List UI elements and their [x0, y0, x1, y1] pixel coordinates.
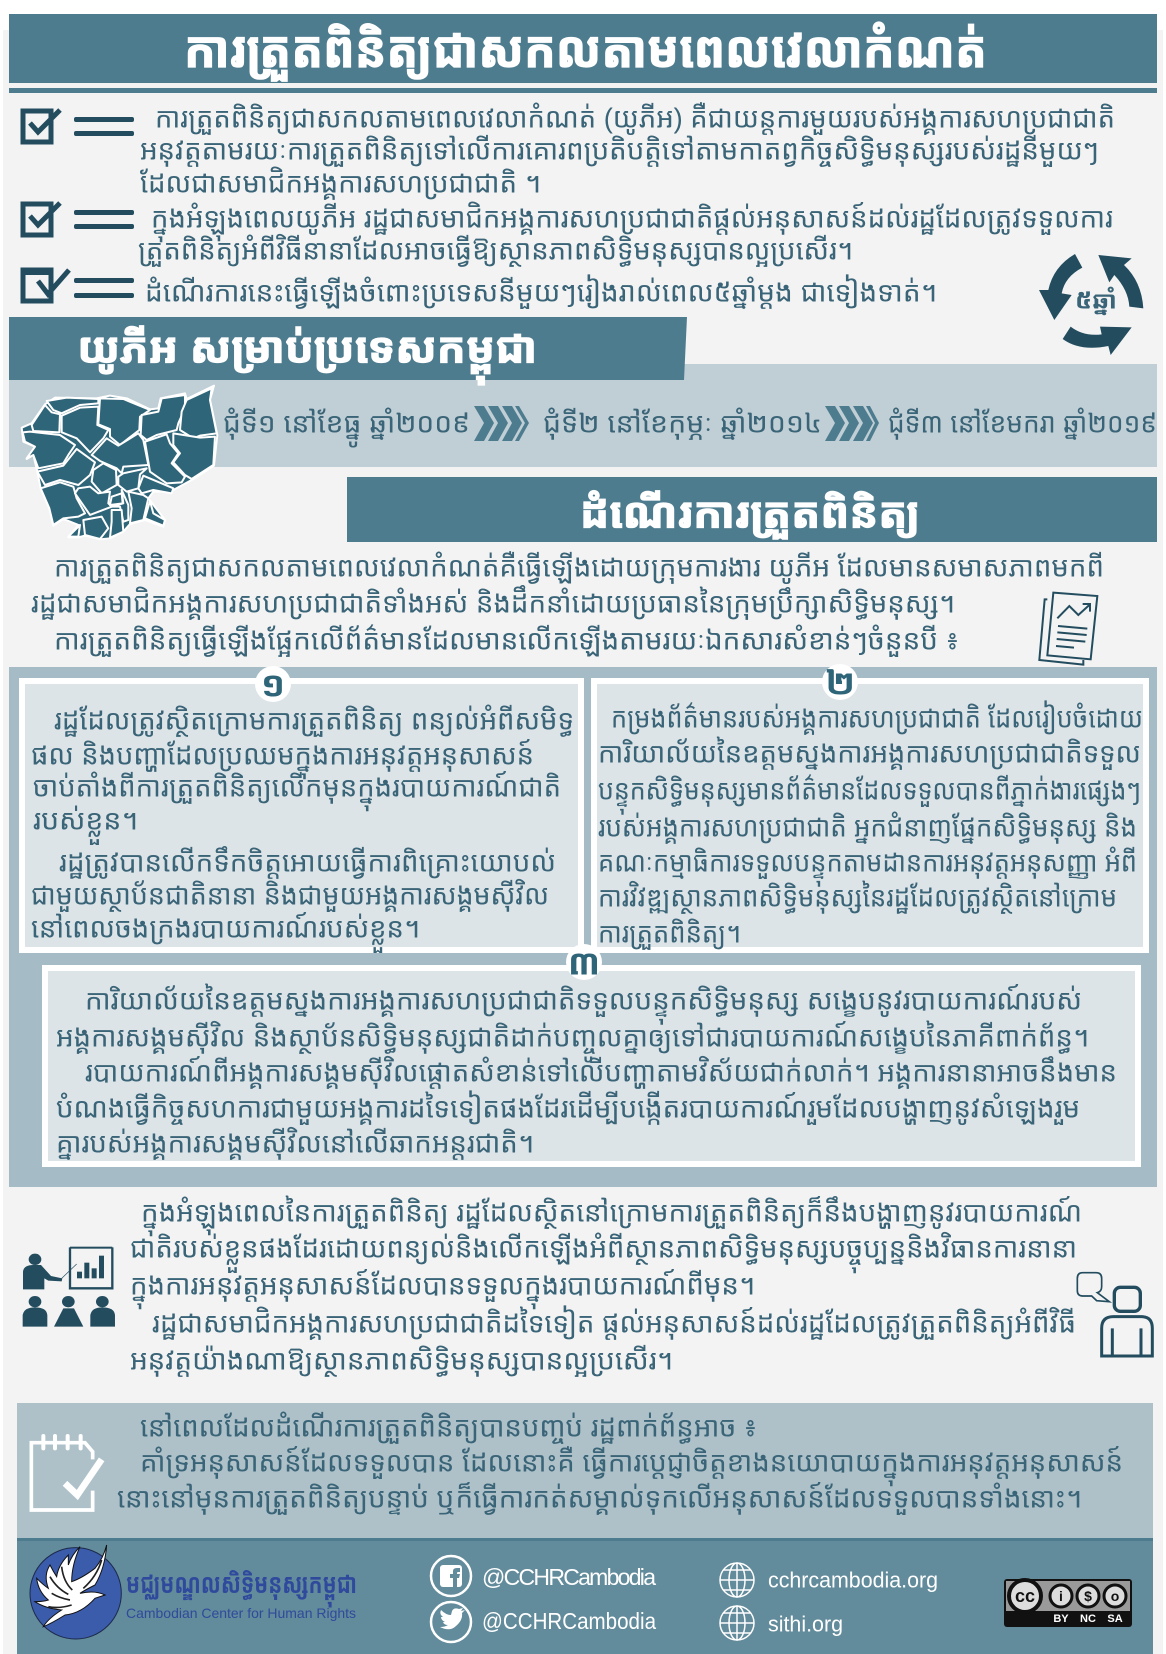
icon: checkbox 3 — [21, 268, 134, 301]
box 2 text: របស់អង្គការសហប្រជាជាតិ អ្នកជំនាញផ្នែកសិទ្ធិមនុស្ស និង — [598, 811, 1137, 845]
twitter handle: @CCHRCambodia — [482, 1608, 656, 1634]
icon: globe 2 — [720, 1606, 754, 1640]
box 3 text: គ្នារបស់អង្គការសង្គមស៊ីវិលនៅលើឆាកអន្តរជាតិ។ — [56, 1126, 534, 1161]
icon: creative commons BY-NC-SA: i — [1059, 1588, 1063, 1604]
box 3 text: អង្គការសង្គមស៊ីវិល និងស្ថាប័នសិទ្ធិមនុស្សជាតិដាក់បញ្ចូលគ្នាឲ្យទៅជារបាយការណ៍សង្ខេបនៃភាគីពាក់ព័ន្ធ។ — [56, 1020, 1089, 1062]
arrow: chevrons 1 — [474, 406, 529, 441]
panel: box 3 — [45, 942, 1138, 1164]
panel text: គាំទ្រអនុសាសន៍ដែលទទួលបាន ដែលនោះគឺ ធ្វើការប្តេជ្ញាចិត្តខាងនយោបាយក្នុងការអនុវត្តអនុសាសន៍ — [140, 1444, 1123, 1488]
text block: during review: រដ្ឋជាសមាជិកអង្គការសហប្រជាជាតិដទៃទៀត ផ្តល់អនុសាសន៍ដល់រដ្ឋដែលត្រូវត្រួតពិនិត្យអំពីវិធី — [152, 1304, 1076, 1341]
text block: during review — [130, 1194, 1082, 1378]
panel text: នៅពេលដែលដំណើរការត្រួតពិនិត្យបានបញ្ចប់ រដ្ឋពាក់ព័ន្ធអាច ៖ — [140, 1410, 757, 1444]
facebook handle: @CCHRCambodia — [482, 1564, 656, 1590]
text block: process intro: ការត្រួតពិនិត្យជាសកលតាមពេលវេលាកំណត់គឺធ្វើឡើងដោយក្រុមការងារ យូភីអ ដែលមានសមាសភាពមកពី — [54, 549, 1104, 584]
text block: process intro: រដ្ឋជាសមាជិកអង្គការសហប្រជាជាតិទាំងអស់ និងដឹកនាំដោយប្រធាននៃក្រុមប្រឹក្សាសិទ្ធិមនុស្ស។ — [31, 585, 955, 621]
box 2 text: ការិយាល័យនៃឧត្តមស្នងការអង្គការសហប្រជាជាតិទទួល — [598, 736, 1141, 770]
box 1 text — [31, 703, 574, 953]
icon: creative commons BY-NC-SA: BY — [1053, 1613, 1069, 1625]
icon: creative commons BY-NC-SA: NC — [1080, 1613, 1096, 1625]
schedule band — [9, 364, 1157, 467]
website 1: cchrcambodia.org — [768, 1568, 938, 1592]
text block: process intro: ការត្រួតពិនិត្យធ្វើឡើងផ្អែកលើព័ត៌មានដែលមានលើកឡើងតាមរយៈឯកសារសំខាន់ៗចំនួនបី ៖ — [54, 622, 959, 657]
box 3 text: ការិយាល័យនៃឧត្តមស្នងការអង្គការសហប្រជាជាតិទទួលបន្ទុកសិទ្ធិមនុស្ស សង្ខេបនូវរបាយការណ៍របស់ — [85, 982, 1082, 1026]
box 2 text: ការវិវឌ្ឍស្ថានភាពសិទ្ធិមនុស្សនៃរដ្ឋដែលត្រូវស្ថិតនៅក្រោម — [598, 880, 1117, 915]
icon: five year cycle arrows — [1039, 254, 1143, 355]
title banner — [9, 14, 1157, 93]
box 1 text: ជាមួយស្ថាប័នជាតិនានា និងជាមួយអង្គការសង្គមស៊ីវិល — [31, 878, 549, 913]
logo text Khmer: មជ្ឈមណ្ឌលសិទ្ធិមនុស្សកម្ពុជា — [126, 1569, 357, 1608]
heading: UPR for Cambodia — [9, 317, 687, 386]
text block: during review: ក្នុងអំឡុងពេលនៃការត្រួតពិនិត្យ រដ្ឋដែលស្ថិតនៅក្រោមការត្រួតពិនិត្យក៏នឹងបង្ហាញនូវរបាយការណ៍ — [141, 1194, 1082, 1238]
panel: box 2 — [594, 662, 1146, 950]
icon: notepad with check — [31, 1436, 102, 1510]
icon: checkbox 2 — [23, 203, 134, 235]
icon: creative commons BY-NC-SA: SA — [1107, 1613, 1123, 1625]
website 2: sithi.org — [768, 1612, 843, 1636]
text block: during review: ក្នុងការអនុវត្តអនុសាសន៍ដែលបានទទួលក្នុងរបាយការណ៍ពីមុន។ — [130, 1268, 755, 1311]
text block: intro 1: ដែលជាសមាជិកអង្គការសហប្រជាជាតិ ។ — [140, 166, 541, 200]
icon: creative commons BY-NC-SA: $ — [1084, 1588, 1092, 1604]
text block: intro 3: ដំណើរការនេះធ្វើឡើងចំពោះប្រទេសនីមួយៗរៀងរាល់ពេល៥ឆ្នាំម្តង ជាទៀងទាត់។ — [145, 274, 937, 309]
icon: twitter — [431, 1602, 471, 1642]
icon: creative commons BY-NC-SA: cc — [1015, 1586, 1035, 1606]
box 1 text: របស់ខ្លួន។ — [33, 804, 138, 845]
icon: creative commons BY-NC-SA — [1004, 1579, 1132, 1627]
box 1 text: រដ្ឋដែលត្រូវស្ថិតក្រោមការត្រួតពិនិត្យ ពន្យល់អំពីសមិទ្ធ — [54, 703, 574, 737]
text block: intro 1 — [140, 100, 1115, 200]
icon: creative commons BY-NC-SA: o — [1111, 1588, 1119, 1604]
logo: CCHR bird — [30, 1545, 121, 1639]
heading: UPR for Cambodia: យូភីអ សម្រាប់ប្រទេសកម្ពុជា — [78, 324, 537, 386]
heading: review process — [347, 477, 1157, 542]
text block: during review: អនុវត្តយ៉ាងណាឱ្យស្ថានភាពសិទ្ធិមនុស្សបានល្អប្រសើរ។ — [130, 1343, 673, 1378]
schedule: round 1: ជុំទី១ នៅខែធ្នូ ឆ្នាំ២០០៩ — [223, 406, 470, 448]
box 1 text: ផល និងបញ្ហាដែលប្រឈមក្នុងការអនុវត្តអនុសាសន៍ — [31, 738, 534, 781]
box 1 text: នៅពេលចងក្រងរបាយការណ៍របស់ខ្លួន។ — [31, 911, 420, 953]
arrow: chevrons 2 — [825, 406, 879, 441]
heading: review process: ដំណើរការត្រួតពិនិត្យ — [580, 489, 920, 540]
icon: person with speech bubble — [1077, 1273, 1152, 1356]
icon: presenter and audience — [23, 1247, 115, 1327]
panel: three source documents — [9, 662, 1157, 1187]
text block: during review: ជាតិរបស់ខ្លួនផងដែរដោយពន្យល់និងលើកឡើងអំពីស្ថានភាពសិទ្ធិមនុស្សបច្ចុប្បន្ននិងវិធានការនានា — [130, 1231, 1077, 1274]
footer — [17, 1538, 1153, 1654]
icon: document with chart — [1039, 593, 1097, 665]
badge 1: ១ — [261, 664, 285, 704]
badge 3: ៣ — [568, 942, 600, 982]
icon: checkbox 1 — [23, 110, 134, 142]
panel text — [117, 1410, 1123, 1516]
title: ការត្រួតពិនិត្យជាសកលតាមពេលវេលាកំណត់ — [184, 22, 987, 81]
text block: intro 2: ក្នុងអំឡុងពេលយូភីអ រដ្ឋជាសមាជិកអង្គការសហប្រជាជាតិផ្តល់អនុសាសន៍ដល់រដ្ឋដែលត្រូវទទួលការ — [151, 201, 1113, 244]
box 1 text: រដ្ឋត្រូវបានលើកទឹកចិត្តអោយធ្វើការពិគ្រោះយោបល់ — [59, 845, 556, 879]
panel: box 1 — [22, 664, 581, 953]
text block: intro 1: អនុវត្តតាមរយៈការត្រួតពិនិត្យទៅលើការគោរពប្រតិបត្តិទៅតាមកាតព្វកិច្ចសិទ្ធិមនុស្សរបស់រដ្ឋនីមួយៗ — [140, 133, 1099, 168]
text block: intro 2: ត្រួតពិនិត្យអំពីវិធីនានាដែលអាចធ្វើឱ្យស្ថានភាពសិទ្ធិមនុស្សបានល្អប្រសើរ។ — [138, 233, 853, 268]
schedule: round 2: ជុំទី២ នៅខែកុម្ភៈ ឆ្នាំ២០១៤ — [543, 406, 822, 441]
icon: globe 1 — [720, 1563, 754, 1597]
panel: after the review — [17, 1403, 1153, 1538]
badge 2: ២ — [825, 662, 855, 702]
icon: facebook — [431, 1556, 471, 1596]
box 2 text — [598, 700, 1143, 950]
badge 1 — [255, 664, 291, 704]
text block: intro 2 — [138, 201, 1113, 268]
logo text English: Cambodian Center for Human Rights — [126, 1605, 356, 1621]
text block: intro 1: ការត្រួតពិនិត្យជាសកលតាមពេលវេលាកំណត់ (យូភីអ) គឺជាយន្តការមួយរបស់អង្គការសហប្រជាជាតិ — [155, 100, 1115, 135]
box 2 text: ការត្រួតពិនិត្យ។ — [598, 917, 741, 950]
box 3 text: របាយការណ៍ពីអង្គការសង្គមស៊ីវិលផ្តោតសំខាន់ទៅលើបញ្ហាតាមវិស័យជាក់លាក់។ អង្គការនានាអាចនឹងមាន — [85, 1055, 1117, 1090]
cycle label: ៥ឆ្នាំ — [1075, 287, 1117, 316]
box 3 text — [56, 982, 1117, 1161]
panel text: នោះនៅមុនការត្រួតពិនិត្យបន្ទាប់ ឬក៏ធ្វើការកត់សម្គាល់ទុកលើអនុសាសន៍ដែលទទួលបានទាំងនោះ។ — [117, 1481, 1082, 1516]
box 3 text: បំណងធ្វើកិច្ចសហការជាមួយអង្គការដទៃទៀតផងដែរដើម្បីបង្កើតរបាយការណ៍រួមដែលបង្ហាញនូវសំឡេងរួម — [56, 1090, 1080, 1125]
map of Cambodia — [22, 386, 217, 539]
box 1 text: ចាប់តាំងពីការត្រួតពិនិត្យលើកមុនក្នុងរបាយការណ៍ជាតិ — [33, 770, 561, 813]
text block: process intro — [31, 549, 1104, 657]
